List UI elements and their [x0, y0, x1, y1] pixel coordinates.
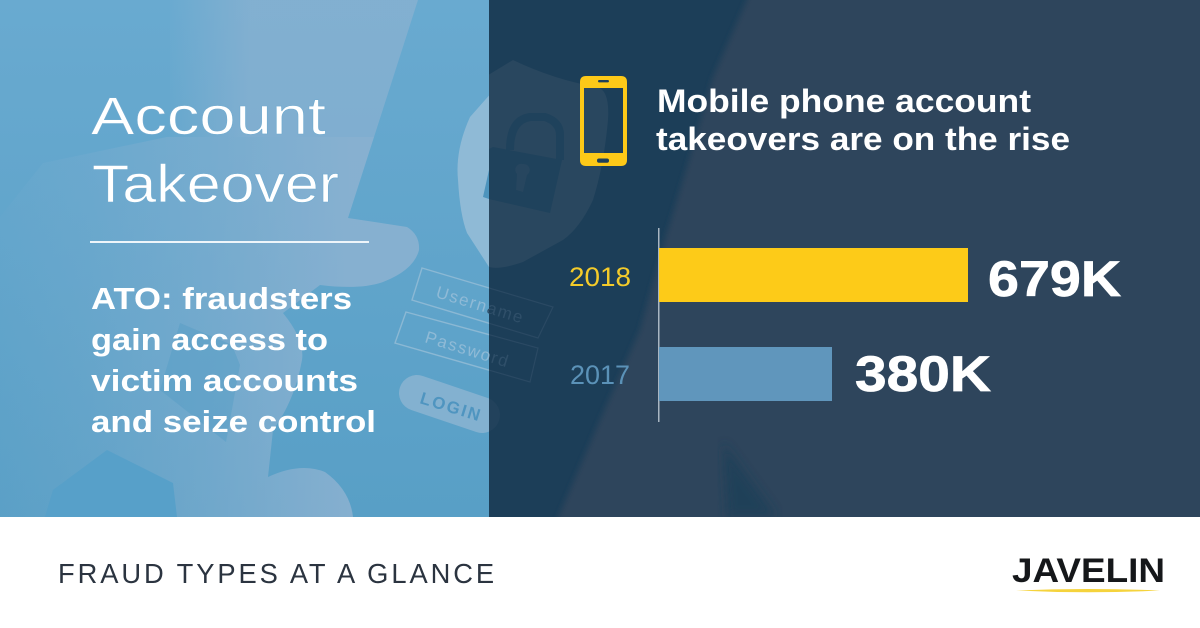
icon: smartphone — [580, 76, 627, 166]
bar: 2018: 2018 — [569, 262, 631, 292]
login form graphic — [395, 268, 553, 425]
title: Account Takeover — [91, 87, 339, 214]
heading: mobile phone account takeovers: takeovers are on the rise — [656, 121, 1070, 157]
bar chart: mobile phone account takeovers by year — [569, 228, 1121, 422]
footer label: fraud types at a glance: FRAUD TYPES AT A GLANCE — [58, 558, 497, 589]
text block: ATO definition — [91, 281, 376, 439]
bar: 2018: 679K — [988, 251, 1121, 307]
logo: Javelin: JAVELIN — [1012, 552, 1165, 590]
bar: 2017: 2017 — [570, 360, 630, 390]
background: shield and padlock — [480, 60, 608, 268]
login form graphic: Username — [434, 283, 527, 327]
title: Account Takeover: Takeover — [92, 155, 339, 214]
bar: 2018 — [569, 248, 1121, 307]
login form graphic: Password — [423, 328, 512, 371]
text block: ATO definition: and seize control — [91, 404, 376, 439]
login form graphic: LOGIN — [418, 389, 484, 425]
text block: ATO definition: ATO: fraudsters — [91, 281, 352, 316]
heading: mobile phone account takeovers — [656, 83, 1070, 157]
panel: left blue background with hand and login photo — [0, 0, 500, 517]
axis line — [658, 228, 660, 422]
bar: 2017: 380K — [855, 346, 991, 402]
title: Account Takeover: Account — [91, 87, 326, 146]
divider under title — [90, 241, 369, 243]
bar: 2017 — [570, 346, 991, 402]
heading: mobile phone account takeovers: Mobile phone account — [657, 83, 1031, 119]
text block: ATO definition: gain access to — [91, 322, 328, 357]
text block: ATO definition: victim accounts — [91, 363, 358, 398]
panel: right navy background — [489, 0, 1200, 560]
